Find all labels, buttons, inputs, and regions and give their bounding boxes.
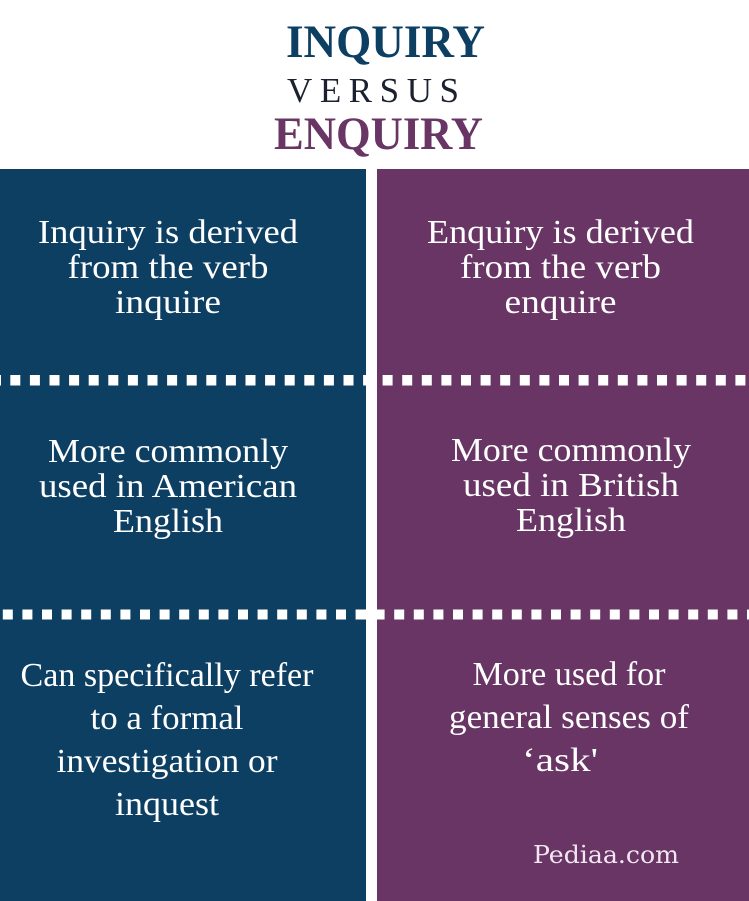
text: enquiry meaning: More used for [472,656,666,693]
text: inquiry usage: used in American [39,468,297,505]
text: inquiry meaning: to a formal [90,700,244,737]
text: inquiry derivation: Inquiry is derived [38,214,298,251]
text: enquiry derivation [427,214,694,321]
text: enquiry usage: More commonly [451,432,691,469]
text: enquiry usage [451,432,691,539]
text: enquiry usage: English [516,502,626,539]
text: inquiry usage: More commonly [48,433,288,470]
heading: inquiry: INQUIRY [286,16,485,68]
text: inquiry meaning [20,657,314,823]
text: enquiry meaning [449,656,690,779]
text: inquiry meaning: Can specifically refer [20,657,314,694]
text: inquiry usage [39,433,297,540]
divider: upper dotted row [0,375,745,386]
text: inquiry derivation [38,214,298,321]
heading: versus: VERSUS [287,71,459,110]
text: inquiry derivation: inquire [115,284,221,321]
text: enquiry derivation: Enquiry is derived [427,214,694,251]
text: inquiry usage: English [113,503,223,540]
text: inquiry meaning: inquest [115,786,220,823]
text: enquiry meaning: general senses of [449,699,690,736]
text: inquiry meaning: investigation or [56,743,278,780]
divider: lower dotted row [3,610,749,620]
title [274,16,485,160]
text: inquiry derivation: from the verb [68,249,268,286]
heading: enquiry: ENQUIRY [274,108,483,160]
panel: inquiry [0,169,366,901]
logo: Pediaa.com: Pediaa.com [533,841,679,869]
text: enquiry derivation: from the verb [460,249,661,286]
text: enquiry meaning: ‘ask' [522,742,598,779]
panel: enquiry [377,169,749,901]
text: enquiry derivation: enquire [504,284,616,321]
text: enquiry usage: used in British [463,467,679,504]
